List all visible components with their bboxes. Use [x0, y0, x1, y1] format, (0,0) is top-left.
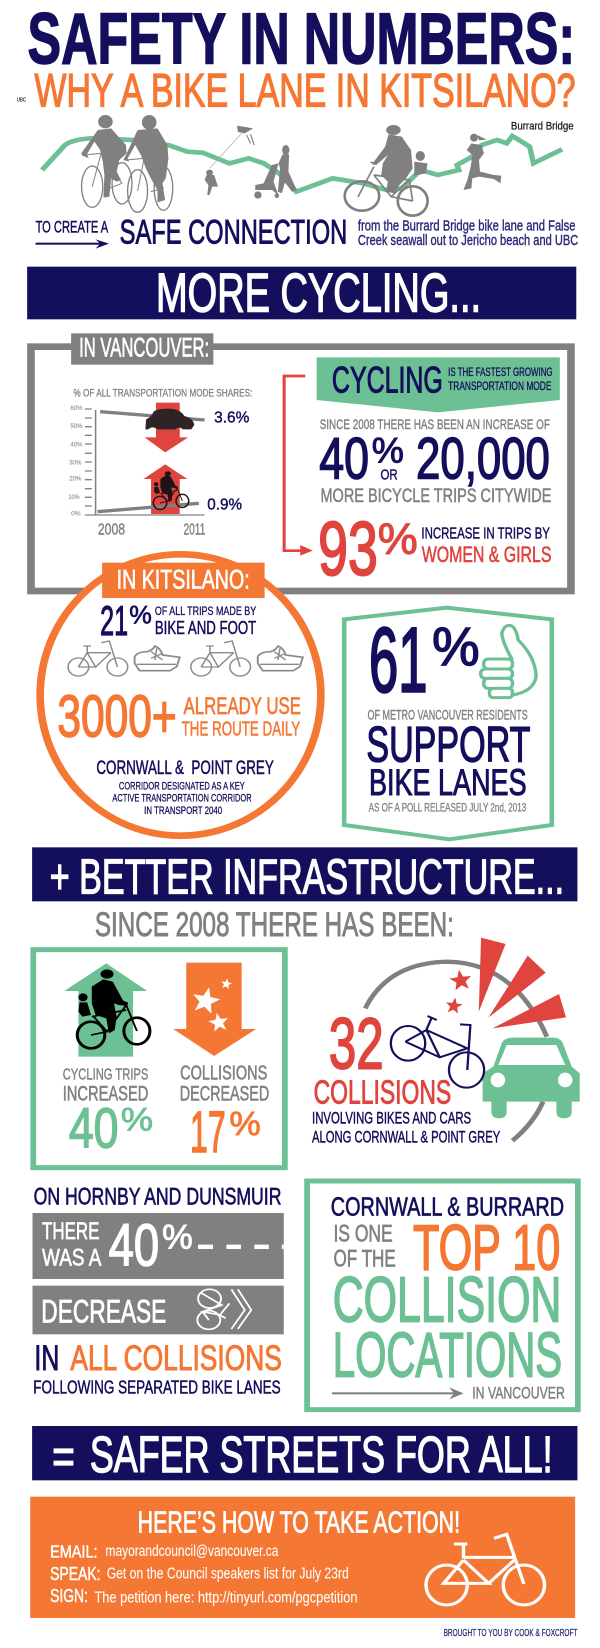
- road block: 40 percent: [33, 1213, 284, 1279]
- location heading: ON HORNBY AND DUNSMUIR: [34, 1184, 281, 1210]
- red impact spikes: [445, 938, 566, 1028]
- mode share chart: [68, 388, 252, 538]
- cycling trips statistic: CYCLING TRIPS: [63, 1064, 148, 1083]
- badge outline: [344, 608, 552, 839]
- icon: bike: [191, 641, 250, 676]
- icon: child flying kite: [205, 126, 254, 195]
- corridor note: IN TRANSPORT 2040: [144, 804, 222, 817]
- green banner: cycling fastest growing: CYCLING: [332, 360, 443, 401]
- icon: bike: [68, 641, 128, 676]
- section: better infrastructure: [32, 847, 580, 1168]
- corridor note: ACTIVE TRANSPORTATION CORRIDOR: [112, 791, 252, 804]
- icon: shoe: [258, 646, 303, 671]
- email action: EMAIL:: [50, 1542, 98, 1562]
- road block: decrease: DECREASE: [41, 1295, 166, 1330]
- number 32: 32: [329, 1002, 384, 1084]
- connection lead-in text: TO CREATE A: [36, 217, 108, 236]
- corridor note: CORNWALL & POINT GREY: [96, 757, 274, 779]
- green banner: cycling fastest growing: [317, 357, 560, 412]
- speak action: Get on the Council speakers list for July 23rd: [107, 1566, 349, 1582]
- panel frame: [31, 347, 571, 591]
- year 2008: 2008: [98, 522, 125, 538]
- cycling trips statistic: 40: [69, 1096, 119, 1159]
- axis labels: 30%: [69, 460, 81, 466]
- icon: bike: [426, 1534, 545, 1605]
- axis labels: [68, 405, 83, 517]
- collisions statistic: [180, 1061, 269, 1165]
- sign action: The petition here: http://tinyurl.com/pgcpetition: [94, 1589, 358, 1606]
- road block: decrease: [33, 1286, 284, 1334]
- collisions text: FOLLOWING SEPARATED BIKE LANES: [33, 1378, 281, 1398]
- 21 percent statistic: BIKE AND FOOT: [155, 618, 256, 639]
- arrow: [36, 239, 109, 249]
- panel: in Vancouver: [31, 333, 571, 592]
- axis labels: 50%: [70, 423, 83, 430]
- value: car: 3.6%: [214, 408, 249, 426]
- axis labels: 20%: [69, 476, 81, 483]
- axis labels: 60%: [70, 405, 83, 412]
- road block: 40 percent: WAS A: [42, 1245, 101, 1271]
- circle heading: IN KITSILANO:: [117, 565, 250, 595]
- increase statistic: 40: [319, 427, 369, 491]
- 21 percent statistic: 21: [100, 597, 128, 644]
- increase statistic: %: [372, 432, 404, 471]
- collisions text: IN: [34, 1339, 59, 1378]
- section: safer streets and action: [30, 1426, 578, 1639]
- safe connection heading: SAFE CONNECTION: [120, 213, 347, 251]
- icon: cyclist: [77, 969, 150, 1048]
- collisions statistic: 17: [190, 1100, 226, 1165]
- route end label: Burrard Bridge: [511, 119, 574, 132]
- increase statistic: OR: [380, 467, 398, 483]
- icon: shoe: [135, 646, 180, 671]
- red bracket arrow: [284, 376, 313, 556]
- cycling trips statistic: [63, 1064, 153, 1159]
- 61 percent statistic: 61: [369, 608, 428, 711]
- chart axes and ticks: [85, 409, 205, 515]
- collisions statistic: DECREASED: [180, 1081, 269, 1105]
- section: separated lanes and top 10: [33, 1181, 578, 1410]
- icon: cyclist with child seat: [345, 125, 428, 216]
- corridor note: CORRIDOR DESIGNATED AS A KEY: [119, 779, 245, 792]
- road block: 40 percent: THERE: [42, 1219, 99, 1245]
- speak action: [50, 1564, 349, 1585]
- panel: trips and collisions: [33, 950, 285, 1168]
- increase statistic: [319, 417, 551, 507]
- 3000 plus statistic: THE ROUTE DAILY: [182, 717, 300, 740]
- green route line: [42, 136, 562, 192]
- road block: 40 percent: %: [162, 1218, 193, 1256]
- icon: car: [483, 1038, 580, 1118]
- women and girls statistic: [318, 507, 551, 592]
- icon: parent with stroller: [254, 145, 297, 199]
- panel: poll badge: [344, 608, 552, 839]
- red down arrow: [145, 403, 188, 452]
- speak action: SPEAK:: [50, 1564, 101, 1585]
- panel heading: [71, 333, 213, 365]
- is one of the: OF THE: [333, 1246, 396, 1272]
- bike trend line: [98, 503, 199, 512]
- panel: in Kitsilano circle: [40, 554, 321, 836]
- 3000 plus statistic: ALREADY USE: [184, 692, 301, 720]
- orange down arrow with stars: [173, 963, 256, 1056]
- 21 percent statistic: [100, 597, 256, 644]
- corridor note: [96, 757, 274, 817]
- car trend line: [100, 412, 205, 420]
- connection description: [358, 219, 578, 249]
- axis labels: 40%: [70, 442, 83, 448]
- cycling trips statistic: INCREASED: [63, 1081, 148, 1105]
- green frame: [307, 1181, 578, 1410]
- panel heading: IN VANCOUVER:: [79, 333, 209, 363]
- green frame: [33, 950, 285, 1168]
- panel: top 10 collision locations: [307, 1181, 578, 1410]
- chart title: % OF ALL TRANSPORTATION MODE SHARES:: [73, 388, 252, 399]
- road block: 40 percent: 40: [109, 1214, 159, 1279]
- icon: runner: [463, 134, 501, 190]
- orange circle: [40, 554, 321, 836]
- 21 percent statistic: OF ALL TRIPS MADE BY: [155, 604, 256, 618]
- grey road arc: [365, 962, 547, 1141]
- collisions label: COLLISIONS: [314, 1074, 451, 1111]
- women and girls statistic: %: [378, 513, 418, 563]
- icon: bike lane marking: [197, 1289, 251, 1329]
- poll text: [366, 707, 530, 814]
- collisions statistic: COLLISIONS: [180, 1061, 267, 1084]
- route start label: UBC: [17, 98, 26, 103]
- arrow: [332, 1387, 463, 1399]
- sign action: SIGN:: [50, 1586, 88, 1607]
- value: bike: 0.9%: [207, 494, 242, 513]
- panel: 32 collisions: [312, 938, 580, 1146]
- panel: Hornby and Dunsmuir: [33, 1184, 284, 1398]
- is one of the: IS ONE: [333, 1221, 393, 1247]
- 61 percent statistic: %: [432, 618, 480, 677]
- axis labels: 0%: [71, 511, 81, 517]
- sign action: [50, 1586, 358, 1607]
- cycling trips statistic: %: [121, 1103, 153, 1138]
- icon: car: [145, 409, 194, 429]
- collisions text: [33, 1339, 282, 1398]
- is one of the: [333, 1221, 396, 1272]
- collisions label: INVOLVING BIKES AND CARS: [312, 1108, 471, 1127]
- collisions label: [312, 1074, 500, 1146]
- panels: Kitsilano and poll: [40, 554, 552, 839]
- collisions text: ALL COLLISIONS: [70, 1339, 282, 1378]
- email action: [50, 1542, 279, 1562]
- green up arrow: [64, 963, 147, 1057]
- women and girls statistic: 93: [318, 507, 378, 592]
- icon: two road cyclists: [81, 115, 173, 212]
- icon: cyclist: [153, 471, 189, 510]
- 21 percent statistic: %: [129, 601, 152, 629]
- circle heading: [102, 563, 265, 598]
- collisions statistic: %: [229, 1105, 261, 1142]
- red up arrow: [143, 464, 187, 514]
- header section: [17, 0, 578, 324]
- icon: thumbs up: [481, 625, 536, 698]
- email action: mayorandcouncil@vancouver.ca: [106, 1543, 279, 1560]
- 3000 plus statistic: 3000+: [57, 685, 177, 750]
- icon: bike: [391, 1016, 484, 1088]
- year 2011: 2011: [184, 522, 205, 538]
- axis labels: 10%: [68, 494, 80, 501]
- panel: take action: [30, 1497, 575, 1618]
